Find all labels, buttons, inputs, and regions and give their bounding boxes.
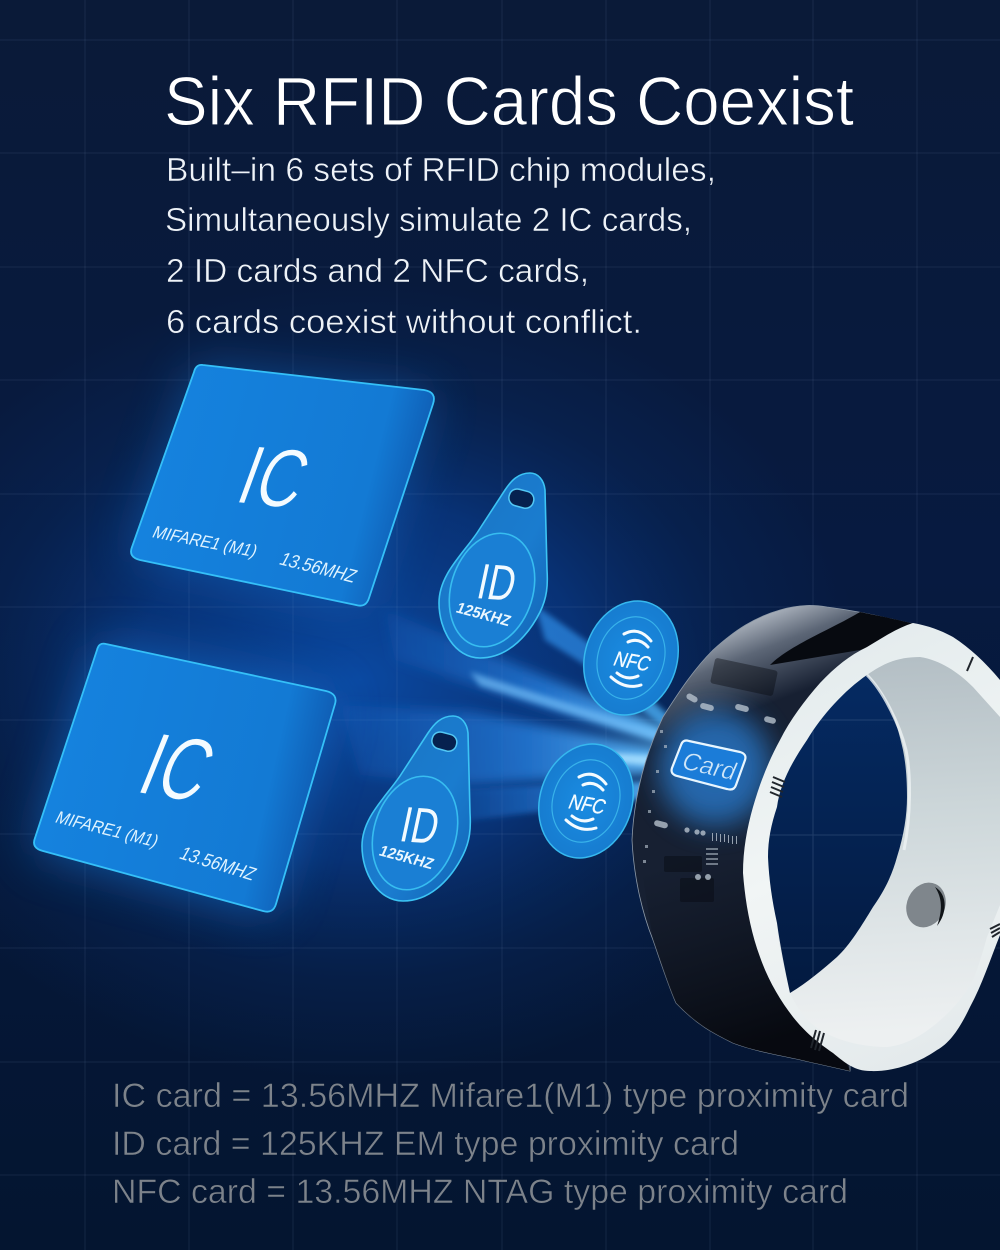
NFC waves: [611, 631, 651, 686]
ring interior: [768, 657, 1000, 1047]
card label IC: IC: [226, 430, 321, 527]
fob label ID: ID: [396, 797, 444, 854]
NFC tag 1: [569, 589, 693, 727]
card body: [131, 365, 434, 606]
card label IC: IC: [126, 715, 228, 821]
fob frequency: 125KHZ: [453, 600, 514, 630]
circuit chips: [664, 658, 778, 902]
card type definitions: [112, 1077, 909, 1211]
fob body: [439, 473, 547, 658]
description text: Built–in 6 sets of RFID chip modules,: [166, 151, 716, 188]
fob body: [362, 716, 470, 901]
card type: MIFARE1 (M1): [149, 522, 261, 561]
card type definitions: ID card = 125KHZ EM type proximity card: [112, 1125, 739, 1163]
fob label ID: ID: [473, 554, 521, 611]
tag label NFC: NFC: [565, 791, 609, 819]
rim tick marks: [770, 657, 1000, 1051]
card body: [34, 644, 336, 912]
white rim: [743, 623, 1000, 1071]
tag disc: [524, 732, 648, 870]
card type definitions: IC card = 13.56MHZ Mifare1(M1) type proximity card: [112, 1077, 909, 1115]
tag label NFC: NFC: [610, 648, 654, 676]
card chip label: [672, 740, 745, 790]
dark wedge at ring top: [770, 612, 927, 665]
description text: 2 ID cards and 2 NFC cards,: [166, 252, 589, 289]
card glow on band: [659, 710, 771, 826]
ring grid in opening: [770, 720, 903, 977]
sensor dark edge: [935, 887, 945, 926]
card frequency: 13.56MHZ: [175, 844, 260, 885]
smart ring: [632, 605, 1000, 1071]
fob inner ring: [359, 766, 471, 900]
title: Six RFID Cards Coexist: [164, 63, 854, 140]
card frequency: 13.56MHZ: [276, 550, 361, 587]
fob hole: [430, 730, 459, 753]
card type: MIFARE1 (M1): [52, 808, 162, 851]
NFC tag 2: [524, 732, 648, 870]
description text: Simultaneously simulate 2 IC cards,: [165, 201, 692, 238]
card glow: [130, 365, 435, 607]
tag inner ring: [542, 751, 630, 851]
ring opening highlight: [867, 675, 910, 850]
fob inner ring: [436, 523, 548, 657]
sensor window: [899, 876, 953, 934]
fob hole: [507, 487, 536, 510]
label box: [672, 740, 745, 790]
circuit details: [643, 692, 777, 880]
ring band: [632, 605, 927, 1071]
card type definitions: NFC card = 13.56MHZ NTAG type proximity card: [112, 1173, 848, 1211]
inner sensor: [899, 876, 953, 934]
ID key fob 2: [359, 716, 471, 901]
card glow: [33, 643, 336, 913]
NFC waves: [566, 774, 606, 829]
fob frequency: 125KHZ: [376, 843, 437, 873]
background glow: [0, 280, 860, 1080]
tag disc: [569, 589, 693, 727]
ring band shade: [640, 860, 850, 1071]
tag inner ring: [587, 608, 675, 708]
band inner effects: [643, 658, 778, 902]
ring opening: [768, 675, 907, 993]
description text: [165, 151, 716, 340]
light beams: [340, 605, 682, 824]
label text: Card: [678, 748, 741, 786]
IC card 1: [130, 365, 435, 607]
description text: 6 cards coexist without conflict.: [166, 303, 642, 340]
ID key fob 1: [436, 473, 548, 658]
IC card 2: [33, 643, 336, 913]
